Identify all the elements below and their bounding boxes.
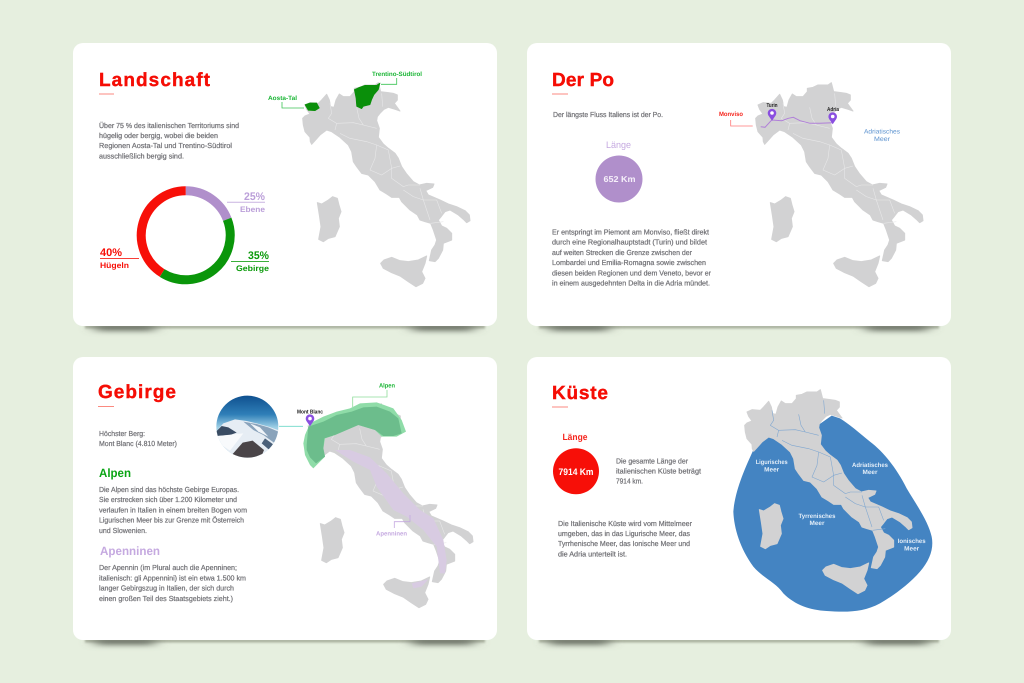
text block: Alpen: Sie erstrecken sich über 1.200 Kilometer und xyxy=(99,495,237,504)
heading: Apenninen: Apenninen xyxy=(100,544,160,558)
heading: Der Po: Der Po xyxy=(552,70,614,91)
label: Trentino-Südtirol xyxy=(372,71,422,84)
text block: description: diesen beiden Regionen und dem Veneto, bevor er xyxy=(552,268,712,277)
leader: photo to Mont Blanc xyxy=(279,425,303,427)
text block: length xyxy=(616,456,701,485)
text block: intro: hügelig oder bergig, wobei die beiden xyxy=(99,131,218,140)
label: 35% Gebirge: 35% xyxy=(248,250,269,262)
label: Trentino-Südtirol: Trentino-Südtirol xyxy=(372,71,422,78)
label: Monviso xyxy=(719,111,753,126)
label: Aosta-Tal xyxy=(268,95,304,108)
map: Italy with mountain ranges xyxy=(306,404,473,608)
label: Apenninen: Apenninen xyxy=(376,530,407,538)
label: 40% Hügeln xyxy=(100,247,139,270)
text: highest mountain: Mont Blanc (4.810 Meter) xyxy=(99,439,177,448)
text block: length: italienischen Küste beträgt xyxy=(616,466,701,475)
sea labels xyxy=(756,459,926,552)
label: Adriatisches Meer: Meer xyxy=(874,136,891,143)
text block: description: auf weiten Strecken die Grenze zwischen der xyxy=(552,248,693,257)
label: Adriatisches Meer xyxy=(864,128,900,143)
text block: description: Lombardei und Emilia-Romagna sowie zwischen xyxy=(552,258,706,267)
label: 40% Hügeln: Hügeln xyxy=(100,261,129,270)
text block: description: in einem ausgedehnten Delta in die Adria mündet. xyxy=(552,278,710,287)
text block: Apenninen xyxy=(99,563,246,603)
label: Alpen: Alpen xyxy=(379,382,395,390)
sea labels: Ligurisches xyxy=(756,459,788,466)
text block: Alpen: verlaufen in Italien in einem breiten Bogen vom xyxy=(99,505,247,514)
pin: Mont Blanc xyxy=(297,408,323,426)
panel: Gebirge xyxy=(73,357,497,640)
text block: description: Er entspringt im Piemont am Monviso, fließt direkt xyxy=(552,228,709,237)
sea labels: Ionisches xyxy=(898,538,926,545)
sea labels: Meer xyxy=(862,469,878,476)
sea shape xyxy=(733,416,932,612)
region: Apennines xyxy=(335,450,447,588)
photo: Mont Blanc xyxy=(215,395,280,460)
sea labels: Adriatisches xyxy=(852,462,889,469)
text block: intro: ausschließlich bergig sind. xyxy=(99,152,184,160)
sea labels: Meer xyxy=(810,520,825,527)
label: 25% Ebene: Ebene xyxy=(240,205,266,214)
text block: seas: umgeben, das in das Ligurische Meer, das xyxy=(558,529,690,538)
label: Alpen xyxy=(353,382,395,407)
text block: Apenninen: italienisch: gli Appennini) ist ein etwa 1.500 km xyxy=(99,573,246,582)
text block: Alpen xyxy=(99,485,247,535)
label: Monviso: Monviso xyxy=(719,111,743,118)
region: Alps xyxy=(303,402,406,468)
label: Aosta-Tal: Aosta-Tal xyxy=(268,95,297,102)
text: highest mountain: Höchster Berg: xyxy=(99,429,145,438)
pin: Mont Blanc: Mont Blanc xyxy=(297,408,323,416)
label: Adriatisches Meer: Adriatisches xyxy=(864,128,900,136)
card shadows xyxy=(85,324,939,645)
text block: seas: Die Italienische Küste wird vom Mittelmeer xyxy=(558,519,693,528)
label: 25% Ebene: 25% xyxy=(244,191,265,203)
circle: 7914 Km xyxy=(553,448,599,494)
text block: seas: Tyrrhenische Meer, das Ionische Meer und xyxy=(558,539,690,548)
heading: Alpen: Alpen xyxy=(99,466,131,480)
heading: Küste: Küste xyxy=(552,383,608,404)
donut chart xyxy=(141,191,230,280)
text block: Apenninen: langer Gebirgszug in Italien, der sich durch xyxy=(99,584,234,593)
text block: intro xyxy=(99,121,239,160)
text: highest mountain xyxy=(99,429,177,448)
text block: intro: Regionen Aosta-Tal und Trentino-Südtirol xyxy=(99,141,232,150)
text block: Apenninen: einen großen Teil des Staatsgebiets zieht.) xyxy=(99,594,233,603)
text block: seas xyxy=(558,519,693,559)
text block: Alpen: Ligurischen Meer bis zur Grenze mit Österreich xyxy=(99,516,244,525)
pin: Adria: Adria xyxy=(827,106,840,113)
text block: Alpen: Die Alpen sind das höchste Gebirge Europas. xyxy=(99,485,239,494)
map: Italy with Po river xyxy=(756,83,923,287)
label: Apenninen xyxy=(376,515,410,538)
heading: Landschaft: Landschaft xyxy=(99,70,211,91)
text: intro: Der längste Fluss Italiens ist der Po. xyxy=(553,110,663,119)
label: 25% Ebene xyxy=(227,191,266,214)
pin: Turin: Turin xyxy=(766,102,778,109)
panel: Landschaft xyxy=(73,43,497,326)
map: Italy with Aosta and Trentino highlighted xyxy=(303,83,470,287)
label: Länge: Länge xyxy=(606,140,631,151)
map: Italy with blue borders xyxy=(745,390,912,594)
panel: Küste xyxy=(527,357,951,640)
circle: 7914 Km: 7914 Km xyxy=(558,467,594,478)
heading: Gebirge: Gebirge xyxy=(98,382,176,403)
river: Po xyxy=(761,117,833,127)
circle: 652 Km: 652 Km xyxy=(604,174,636,184)
text block: description xyxy=(552,228,712,287)
sea labels: Meer xyxy=(764,466,780,474)
panel: Der Po xyxy=(527,43,951,326)
label: 35% Gebirge xyxy=(231,250,270,273)
circle: 652 Km xyxy=(596,156,642,202)
text block: Apenninen: Der Apennin (im Plural auch die Apenninen; xyxy=(99,563,237,572)
text block: length: 7914 km. xyxy=(616,476,643,485)
text block: description: durch eine Regionalhauptstadt (Turin) und bildet xyxy=(552,238,707,247)
text block: seas: die Adria unterteilt ist. xyxy=(558,550,627,559)
sea labels: Meer xyxy=(904,546,920,552)
text block: length: Die gesamte Länge der xyxy=(616,456,689,465)
text block: intro: Über 75 % des italienischen Territoriums sind xyxy=(99,121,239,130)
pin: Adria xyxy=(827,106,840,124)
text block: Alpen: und Slowenien. xyxy=(99,526,147,535)
label: Länge: Länge xyxy=(562,432,588,442)
pin: Turin xyxy=(766,102,778,121)
label: 40% Hügeln: 40% xyxy=(100,247,122,259)
sea labels: Tyrrenisches xyxy=(798,513,836,520)
label: 35% Gebirge: Gebirge xyxy=(236,264,270,273)
